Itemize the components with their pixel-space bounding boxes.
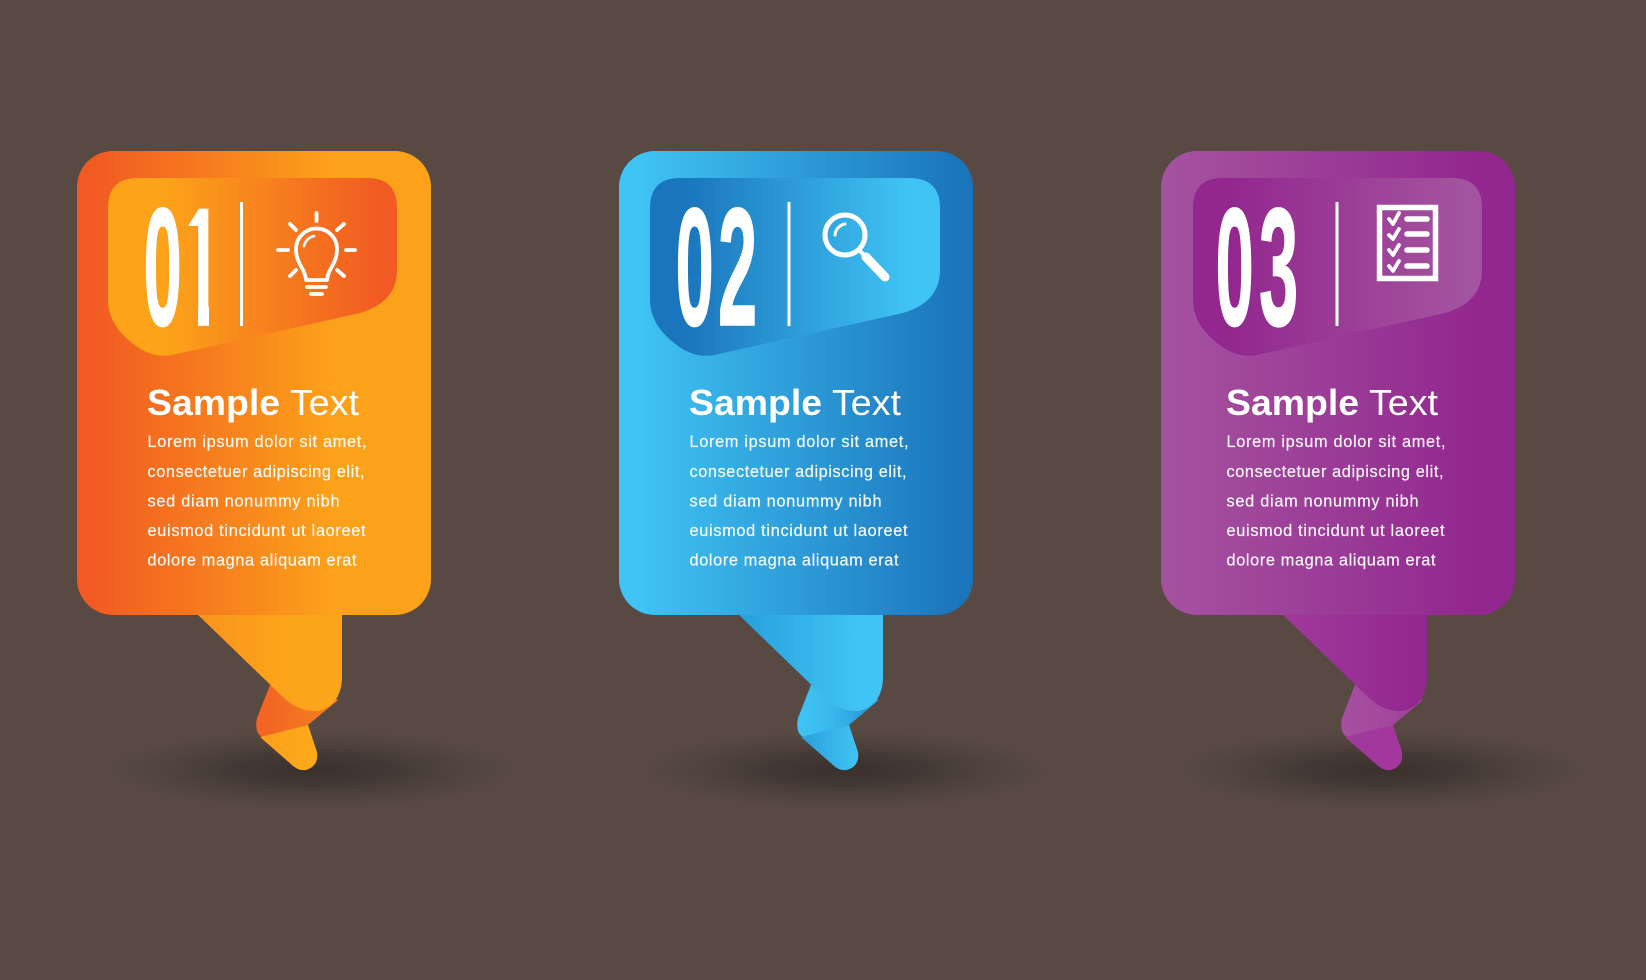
heading 01: Text — [290, 382, 359, 423]
number 03: 3 — [1259, 174, 1298, 362]
number 02: 0 — [676, 175, 714, 362]
divider 02 — [788, 202, 790, 326]
body text 03 — [1226, 433, 1446, 570]
ground shadow 03 — [1177, 730, 1587, 810]
icon: checklist — [1380, 208, 1436, 278]
body text 02: Lorem ipsum dolor sit amet, — [690, 433, 908, 451]
heading 03: Text — [1369, 382, 1438, 423]
divider 03 — [1336, 202, 1338, 326]
number 03: 0 — [1216, 175, 1254, 362]
divider 01 — [240, 202, 243, 326]
panel: step 02 — [619, 151, 1050, 810]
body text 03: dolore magna aliquam erat — [1226, 552, 1436, 570]
number 03 — [1216, 174, 1298, 362]
body text 01: euismod tincidunt ut laoreet — [148, 522, 366, 540]
heading 03: Sample — [1226, 382, 1359, 423]
heading 01: Sample — [147, 382, 280, 423]
icon: magnifier — [825, 215, 885, 277]
number 01: 0 — [144, 175, 182, 362]
heading 01 — [147, 382, 359, 423]
body text 01: Lorem ipsum dolor sit amet, — [148, 433, 366, 451]
ground shadow 02 — [640, 730, 1050, 810]
heading 03 — [1226, 382, 1438, 423]
body text 01: sed diam nonummy nibh — [148, 492, 340, 510]
body text 02: euismod tincidunt ut laoreet — [690, 522, 908, 540]
body text 02: sed diam nonummy nibh — [690, 492, 882, 510]
number 01: 1 — [182, 175, 221, 362]
heading 02 — [689, 382, 901, 423]
heading 02: Sample — [689, 382, 822, 423]
heading 02: Text — [832, 382, 901, 423]
body text 03: consectetuer adipiscing elit, — [1226, 463, 1444, 481]
body text 03: sed diam nonummy nibh — [1226, 492, 1418, 510]
pointer tail 02 — [736, 612, 883, 770]
number badge 03 — [1193, 178, 1482, 356]
panel: step 03 — [1161, 151, 1587, 810]
card body 03 — [1161, 151, 1515, 615]
body text 02: dolore magna aliquam erat — [690, 552, 899, 570]
body text 01: consectetuer adipiscing elit, — [148, 463, 364, 481]
number badge 02 — [650, 178, 940, 356]
card body 01 — [77, 151, 431, 615]
number 01 — [146, 207, 209, 328]
body text 01 — [148, 433, 366, 570]
body text 01: dolore magna aliquam erat — [148, 552, 357, 570]
icon: light bulb — [278, 213, 355, 294]
body text 03: Lorem ipsum dolor sit amet, — [1226, 433, 1446, 451]
card body 02 — [619, 151, 973, 615]
body text 02 — [690, 433, 908, 570]
body text 02: consectetuer adipiscing elit, — [690, 463, 906, 481]
panel: step 01 — [77, 151, 454, 798]
number badge 01 — [108, 178, 397, 356]
pointer tail 01 — [195, 612, 342, 770]
number 02: 2 — [718, 174, 757, 362]
body text 03: euismod tincidunt ut laoreet — [1226, 522, 1445, 540]
ground shadow 01 — [107, 730, 517, 810]
number 02 — [676, 174, 757, 362]
pointer tail 03 — [1280, 612, 1427, 770]
